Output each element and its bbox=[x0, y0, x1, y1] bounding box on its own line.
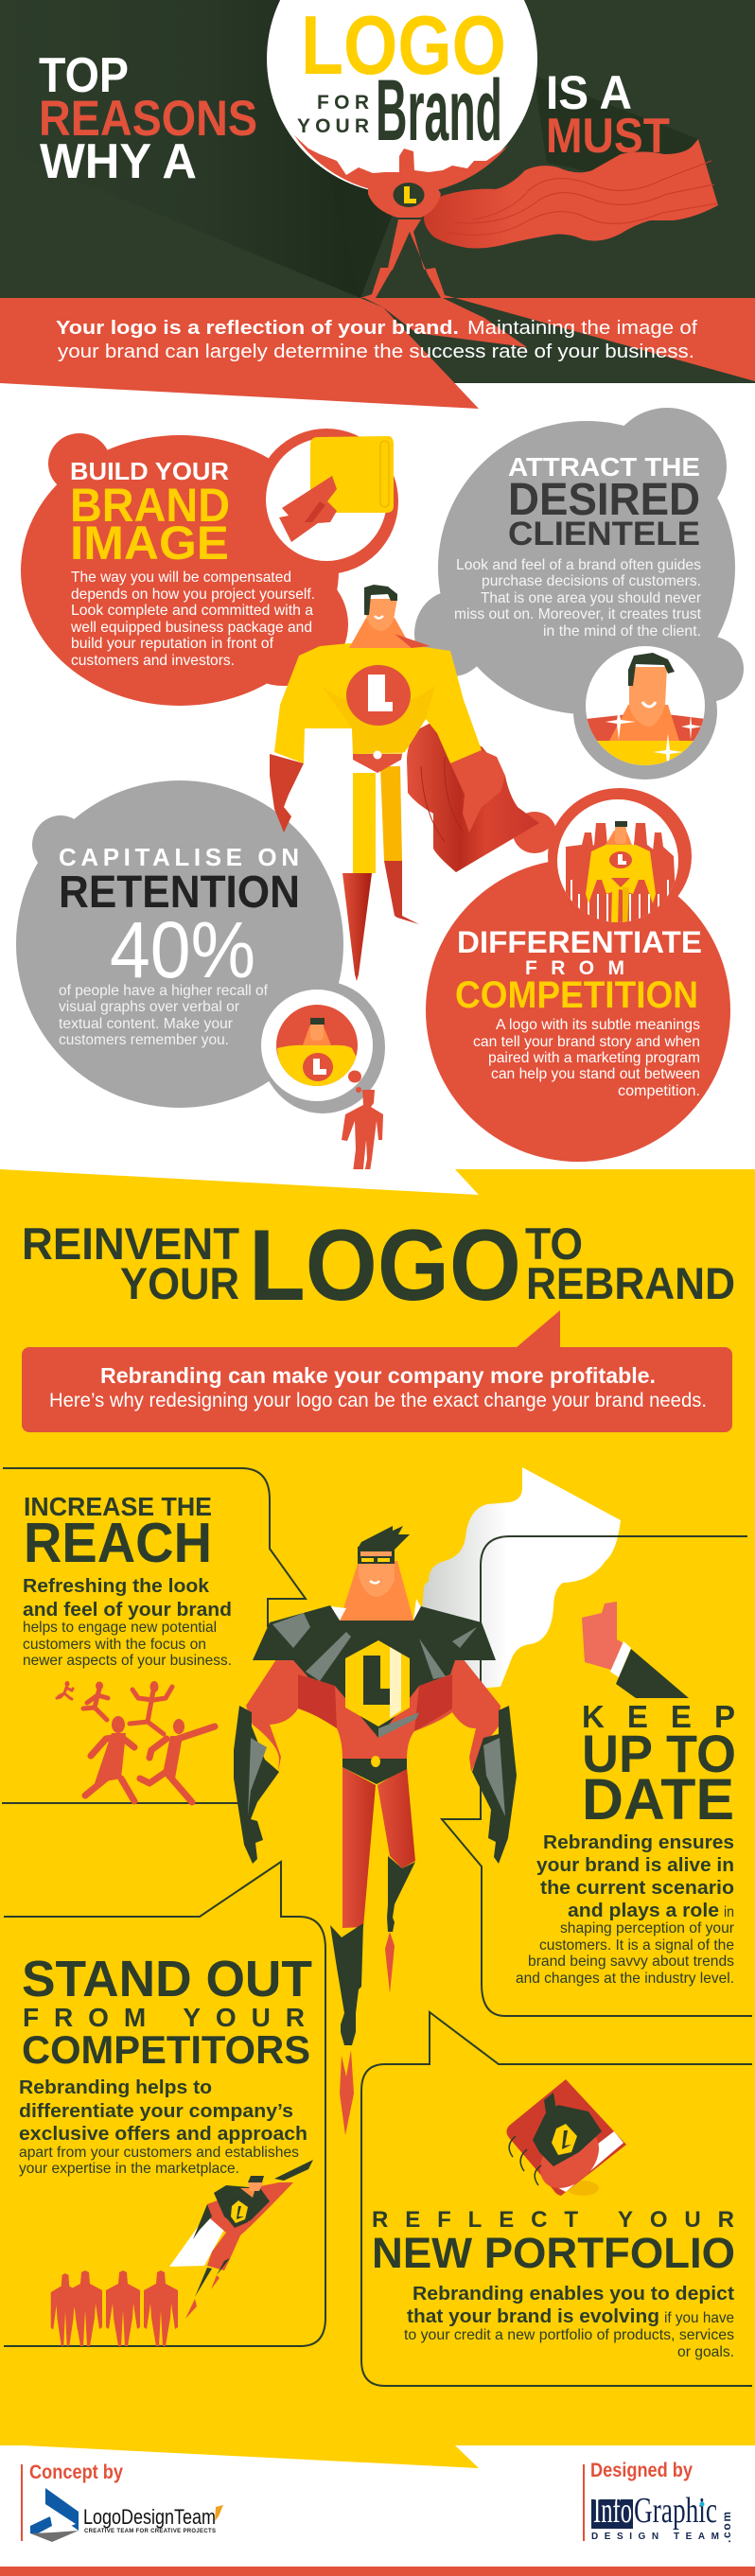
body text: shaping perception of your bbox=[560, 1920, 735, 1936]
heading: UP TO bbox=[582, 1724, 736, 1783]
body text: and plays a role bbox=[568, 1901, 719, 1921]
heading bbox=[70, 457, 230, 570]
heading: DATE bbox=[582, 1767, 734, 1831]
chest logo bbox=[394, 183, 424, 207]
red intro band bbox=[0, 298, 755, 409]
icon: hero among crowd bbox=[566, 821, 676, 922]
body text: visual graphs over verbal or bbox=[59, 999, 240, 1015]
body text bbox=[70, 570, 315, 669]
body text: and feel of your brand bbox=[23, 1600, 232, 1621]
hero: armoured superhero bbox=[234, 1526, 517, 2135]
heading: DESIRED bbox=[508, 475, 700, 525]
body text: A logo with its subtle meanings bbox=[496, 1017, 700, 1033]
bottom band bbox=[0, 2567, 755, 2576]
intro text: Your logo is a reflection of your brand. bbox=[56, 318, 459, 339]
heading: BRAND bbox=[70, 479, 230, 532]
icon: hand holding cloth bbox=[279, 436, 394, 542]
icon: smiling hero portrait bbox=[586, 653, 706, 771]
panel: reflect your new portfolio bbox=[372, 2079, 735, 2360]
heading bbox=[372, 2207, 735, 2277]
heading: reinvent your logo to rebrand: LOGO bbox=[249, 1208, 521, 1322]
title: top reasons why a bbox=[39, 48, 257, 189]
title: logo for your brand: LOGO bbox=[301, 0, 506, 92]
body text bbox=[23, 1576, 232, 1669]
body text: That is one area you should never bbox=[481, 590, 702, 606]
body text: Rebranding enables you to depict bbox=[413, 2284, 734, 2304]
yellow section background bbox=[0, 1169, 755, 2468]
body text: or goals. bbox=[677, 2344, 734, 2360]
panel: build your brand image bbox=[21, 429, 398, 706]
body text: The way you will be compensated bbox=[71, 570, 291, 586]
body text: of people have a higher recall of bbox=[59, 983, 269, 999]
body text: Look complete and committed with a bbox=[71, 603, 313, 619]
icon: portfolio book bbox=[506, 2079, 626, 2199]
body text: miss out on. Moreover, it creates trust bbox=[454, 606, 702, 622]
heading: IMAGE bbox=[70, 517, 229, 570]
title: top reasons why a: TOP bbox=[39, 48, 129, 103]
footer: designed by: Graphic bbox=[634, 2491, 717, 2531]
speech bubble outlines bbox=[2, 1468, 752, 2386]
panel: keep up to date bbox=[516, 1602, 736, 1987]
heading: reinvent your logo to rebrand: REBRAND bbox=[526, 1258, 735, 1308]
icon: thinking person bbox=[342, 1090, 383, 1180]
chest logo bbox=[346, 665, 411, 726]
title: top reasons why a: REASONS bbox=[39, 91, 257, 147]
panel: increase the reach bbox=[23, 1492, 232, 1802]
heading: ATTRACT THE bbox=[508, 452, 700, 482]
body text: in bbox=[724, 1904, 734, 1920]
heading bbox=[508, 452, 700, 552]
heading: reinvent your logo to rebrand: REINVENT bbox=[22, 1218, 239, 1269]
heading: NEW PORTFOLIO bbox=[372, 2229, 735, 2277]
body text: in the mind of the client. bbox=[543, 623, 701, 640]
callout: rebranding profitable: Rebranding can make your company more profitable. bbox=[100, 1363, 656, 1388]
body text: the current scenario bbox=[540, 1878, 734, 1899]
body text: customers remember you. bbox=[59, 1032, 229, 1048]
body text: purchase decisions of customers. bbox=[482, 573, 701, 589]
footer: designed by: Info bbox=[593, 2491, 632, 2531]
heading: reinvent your logo to rebrand: YOUR bbox=[120, 1258, 239, 1308]
white circle bbox=[267, 0, 537, 194]
body text bbox=[473, 1017, 700, 1099]
callout: rebranding profitable bbox=[22, 1310, 732, 1432]
body text: well equipped business package and bbox=[70, 620, 312, 636]
body text: build your reputation in front of bbox=[71, 636, 274, 652]
heading: COMPETITORS bbox=[22, 2027, 310, 2072]
heading: RETENTION bbox=[59, 867, 300, 918]
intro text: your brand can largely determine the success rate of your business. bbox=[58, 342, 694, 362]
icon: hero portrait thought bubble bbox=[276, 1005, 361, 1093]
intro text bbox=[56, 318, 697, 362]
heading: CLIENTELE bbox=[508, 516, 700, 552]
body text: Rebranding helps to bbox=[19, 2077, 212, 2098]
body text bbox=[19, 2077, 307, 2177]
sparkles bbox=[606, 715, 701, 762]
heading bbox=[582, 1699, 736, 1831]
heading: FROM YOUR bbox=[23, 2003, 305, 2032]
body text: Refreshing the look bbox=[23, 1576, 210, 1597]
heading: INCREASE THE bbox=[24, 1492, 212, 1521]
body text: to your credit a new portfolio of products, services bbox=[404, 2327, 734, 2343]
body text: exclusive offers and approach bbox=[19, 2124, 307, 2145]
body text: textual content. Make your bbox=[59, 1016, 234, 1032]
title: logo for your brand: FOR bbox=[317, 92, 369, 114]
body text: newer aspects of your business. bbox=[23, 1653, 232, 1669]
panel: stand out from your competitors bbox=[19, 1951, 313, 2346]
heading: CAPITALISE ON bbox=[59, 843, 299, 871]
body text: if you have bbox=[664, 2310, 734, 2326]
heading: COMPETITION bbox=[455, 974, 698, 1016]
title: logo for your brand: YOUR bbox=[297, 115, 369, 137]
cape bbox=[424, 139, 718, 248]
body text: customers. It is a signal of the bbox=[539, 1937, 734, 1954]
body text: that your brand is evolving bbox=[407, 2306, 659, 2327]
statistic: 40%: 40% bbox=[110, 905, 255, 994]
footer: designed by: DESIGN TEAM bbox=[591, 2532, 719, 2542]
title: is a must bbox=[546, 66, 670, 164]
body text: your expertise in the marketplace. bbox=[19, 2161, 239, 2177]
heading: REACH bbox=[24, 1512, 212, 1574]
body text bbox=[404, 2284, 734, 2360]
icon: flying hero bbox=[169, 2160, 313, 2319]
callout: rebranding profitable: Here’s why redesigning your logo can be the exact change your brand needs. bbox=[49, 1390, 707, 1411]
body text: paired with a marketing program bbox=[488, 1050, 700, 1066]
heading: reinvent your logo to rebrand bbox=[22, 1208, 735, 1322]
gauntlets bbox=[234, 1706, 279, 1864]
footer: concept by bbox=[21, 2462, 223, 2542]
boots and flames bbox=[330, 1923, 363, 2045]
heading: FROM bbox=[525, 957, 624, 979]
title: logo for your brand bbox=[297, 0, 506, 159]
body text: brand being savvy about trends bbox=[528, 1954, 734, 1970]
red body bbox=[246, 1648, 500, 1772]
footer: designed by bbox=[583, 2460, 733, 2543]
heading: DIFFERENTIATE bbox=[457, 925, 702, 959]
intro text: Maintaining the image of bbox=[467, 318, 697, 339]
neck and face bbox=[340, 1561, 413, 1621]
hero holding the circle bbox=[294, 135, 508, 298]
icon: crowd of silhouettes bbox=[51, 2270, 178, 2346]
body text: customers and investors. bbox=[71, 653, 235, 669]
title: logo for your brand: Brand bbox=[376, 62, 502, 159]
icon: thumbs up bbox=[582, 1602, 689, 1698]
footer: concept by: CREATIVE TEAM FOR CREATIVE PROJECTS bbox=[84, 2529, 216, 2534]
title: is a must: MUST bbox=[546, 109, 670, 164]
title: top reasons why a: WHY A bbox=[40, 134, 197, 189]
heading bbox=[59, 843, 300, 918]
body text bbox=[59, 983, 269, 1048]
body text: helps to engage new potential bbox=[23, 1620, 217, 1636]
legs bbox=[342, 1767, 376, 1928]
hero: yellow superhero bbox=[270, 585, 539, 981]
panel: attract the desired clientele bbox=[414, 408, 744, 780]
footer: designed by: Designed by bbox=[590, 2460, 693, 2481]
heading: KEEP bbox=[582, 1699, 735, 1734]
heading: reinvent your logo to rebrand: TO bbox=[525, 1218, 583, 1269]
body text: differentiate your company’s bbox=[19, 2101, 293, 2122]
body text: competition. bbox=[618, 1083, 700, 1099]
body text: customers with the focus on bbox=[23, 1637, 206, 1653]
footer: designed by: .com bbox=[720, 2512, 733, 2543]
body text: and changes at the industry level. bbox=[516, 1971, 734, 1987]
heading bbox=[455, 925, 702, 1016]
heading: BUILD YOUR bbox=[70, 457, 229, 485]
icon: running people bbox=[57, 1681, 215, 1802]
body text bbox=[454, 557, 702, 640]
shield logo bbox=[345, 1640, 410, 1726]
heading: STAND OUT bbox=[22, 1951, 312, 2007]
body text: can help you stand out between bbox=[491, 1066, 700, 1082]
panel: differentiate from competition bbox=[426, 788, 730, 1162]
body text: Rebranding ensures bbox=[543, 1832, 734, 1853]
armour bbox=[253, 1605, 496, 1738]
briefs bbox=[342, 1759, 407, 1784]
header panel bbox=[0, 0, 755, 409]
heading bbox=[22, 1951, 312, 2072]
panel: capitalise on retention bbox=[16, 780, 385, 1180]
hair and mask bbox=[359, 1526, 410, 1550]
icon: logo design team mark bbox=[30, 2488, 223, 2542]
footer: concept by: LogoDesignTeam bbox=[83, 2505, 216, 2529]
heading: REFLECT YOUR bbox=[372, 2207, 734, 2233]
body text: can tell your brand story and when bbox=[473, 1034, 700, 1050]
body text bbox=[516, 1832, 735, 1987]
body text: apart from your customers and establishes bbox=[19, 2145, 299, 2161]
white cape of second hero bbox=[416, 1467, 621, 1693]
body text: depends on how you project yourself. bbox=[71, 587, 315, 603]
body text: your brand is alive in bbox=[536, 1855, 734, 1876]
body text: Look and feel of a brand often guides bbox=[456, 557, 701, 573]
title: is a must: IS A bbox=[546, 66, 632, 119]
footer: concept by: Concept by bbox=[29, 2462, 123, 2483]
